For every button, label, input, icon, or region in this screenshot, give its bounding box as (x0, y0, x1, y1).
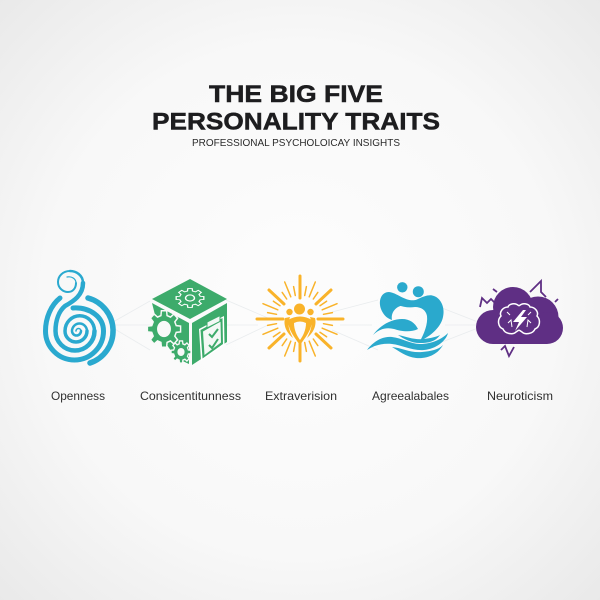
top gear (176, 289, 204, 307)
people (284, 304, 316, 345)
lightning marks (480, 281, 558, 356)
icon: extraversion sunburst (257, 276, 343, 361)
title (152, 81, 440, 136)
label: openness: Openness (51, 389, 105, 403)
icon: openness spiral (46, 271, 113, 363)
label: extraversion: Extraverision (265, 389, 337, 403)
title: THE BIG FIVE (209, 81, 383, 108)
long rays (257, 276, 343, 361)
icon: conscientiousness cube (147, 279, 227, 365)
subtitle: PROFESSIONAL PSYCHOLOICAY INSIGHTS (192, 138, 400, 149)
icon: neuroticism storm cloud (476, 281, 563, 356)
title: PERSONALITY TRAITS (152, 108, 440, 136)
icon: agreeableness figures and waves (367, 282, 448, 358)
label: agreeableness: Agreealabales (372, 389, 449, 403)
cloud (476, 287, 563, 344)
brain and bolt (499, 304, 539, 334)
small gear (171, 341, 191, 363)
cube top face (152, 279, 227, 319)
short rays (263, 282, 337, 356)
large gear (147, 311, 181, 347)
clipboard (199, 316, 224, 361)
cube left face (152, 303, 189, 364)
label: neuroticism: Neuroticism (487, 389, 553, 403)
label: conscientiousness: Consicentitunness (140, 389, 241, 403)
cube right face (192, 303, 227, 365)
